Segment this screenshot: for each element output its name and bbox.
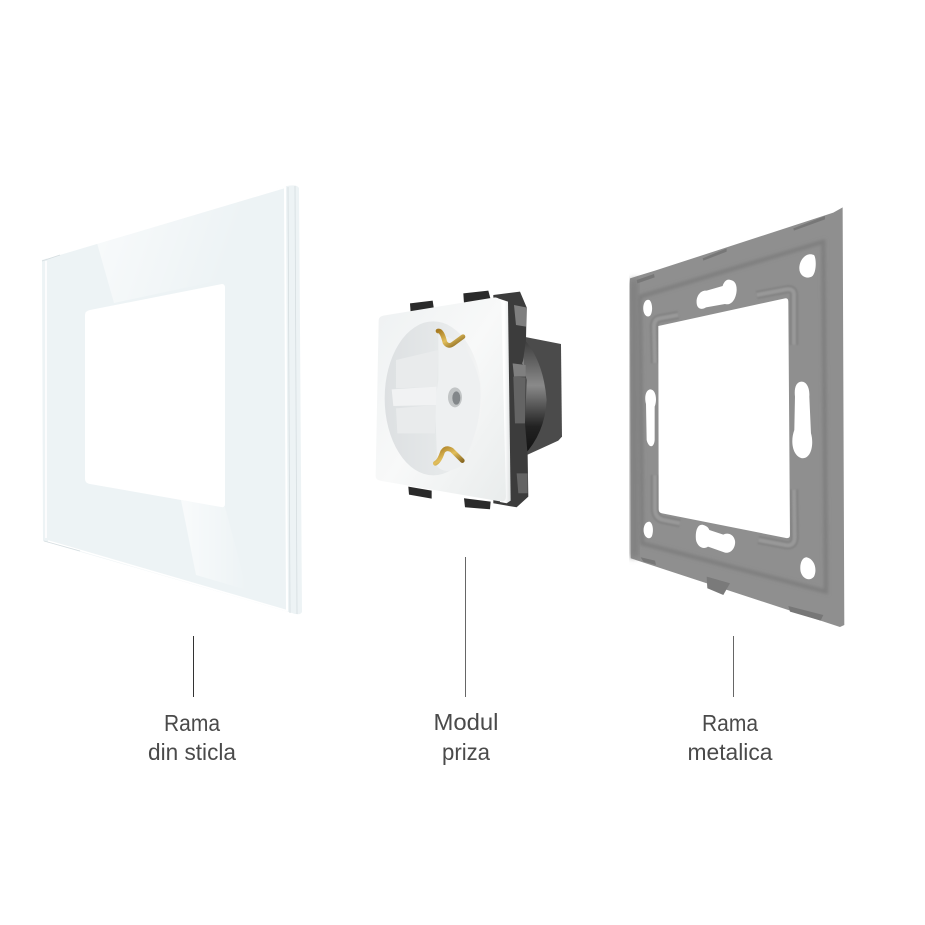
socket well	[385, 321, 482, 475]
label: metal frame	[688, 710, 773, 765]
clips	[408, 291, 491, 509]
top brass contact	[438, 331, 463, 345]
raised centre	[435, 335, 481, 471]
black mounting body	[493, 292, 528, 507]
body highlights	[513, 305, 526, 377]
label: metal frame: Rama	[702, 710, 758, 736]
white face	[376, 298, 506, 502]
leader line: socket module	[464, 557, 466, 697]
glass frame	[42, 185, 302, 614]
window and mounting holes	[643, 254, 816, 579]
glass edge highlights	[46, 187, 288, 611]
metal frame	[630, 207, 844, 627]
upper reflection	[97, 200, 240, 303]
rear cylinder and block	[523, 337, 562, 457]
bottom brass contact	[435, 449, 462, 463]
leader line: metal frame	[732, 636, 734, 697]
label: glass frame	[148, 710, 236, 765]
rim shading	[640, 242, 826, 592]
frame plate	[630, 207, 844, 627]
corner embossed brackets	[654, 289, 795, 545]
label: socket module	[434, 709, 498, 765]
label: socket module: Modul	[434, 709, 498, 735]
bottom clip	[707, 577, 730, 595]
label: glass frame: din sticla	[148, 739, 236, 765]
glass plate	[42, 185, 302, 614]
inner shelves	[396, 350, 438, 433]
white side edge	[495, 297, 511, 503]
label: metal frame: metalica	[688, 739, 773, 765]
tabs on top edge	[637, 216, 825, 283]
tabs on bottom edge	[641, 557, 823, 621]
leader line: glass frame	[192, 636, 194, 697]
center hole	[448, 387, 462, 407]
socket module	[376, 291, 562, 509]
lower reflection	[181, 500, 247, 590]
label: glass frame: Rama	[164, 710, 220, 736]
label: socket module: priza	[442, 739, 490, 765]
